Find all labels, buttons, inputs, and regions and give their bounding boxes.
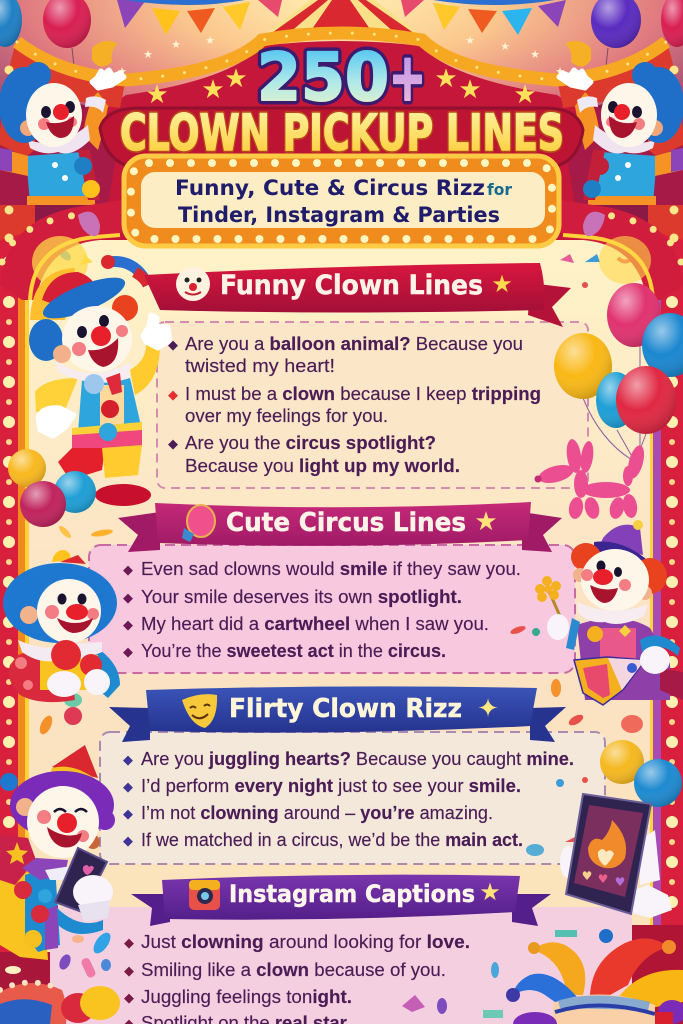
text block: cute circus lines [123, 558, 521, 661]
text block: flirty clown rizz: ◆ [123, 752, 133, 767]
phone with flame: ♥ [582, 869, 592, 883]
heading: instagram captions: Instagram Captions [229, 880, 475, 908]
marquee arch [0, 33, 683, 240]
panel: flirty clown rizz [100, 732, 605, 864]
text block: funny clown lines: Are you a balloon animal? Because you [185, 333, 523, 354]
heading: funny clown lines: Funny Clown Lines [220, 270, 483, 301]
text block: instagram captions: Juggling feelings tonight. [141, 986, 352, 1007]
stars on marquee: ★ [458, 74, 482, 104]
text block: flirty clown rizz: ◆ [123, 806, 133, 821]
text block: funny clown lines: Because you light up my world. [185, 455, 460, 476]
text block: flirty clown rizz: I’m not clowning around – you’re amazing. [141, 802, 493, 823]
icon: star: ★ [491, 271, 513, 298]
text block: funny clown lines: twisted my heart! [185, 355, 335, 376]
heading: flirty clown rizz: Flirty Clown Rizz [229, 694, 462, 724]
title: 250+ outline: + [389, 39, 426, 116]
text block: funny clown lines: Are you the circus spotlight? [185, 432, 436, 453]
text block: cute circus lines: ◆ [123, 590, 133, 605]
sky sparkles: ★ [205, 35, 215, 47]
sky sparkles [117, 35, 565, 78]
jester hat: bottom right [506, 929, 683, 1024]
icon: flame [588, 820, 626, 868]
banner: instagram captions [131, 875, 551, 926]
text block: cute circus lines: Your smile deserves its own spotlight. [141, 586, 462, 607]
text block: instagram captions: Smiling like a clown because of you. [141, 959, 446, 980]
clown: flirty section, holding phone [0, 745, 115, 960]
banner: cute circus lines [118, 502, 562, 552]
text block: funny clown lines: ◆ [168, 337, 178, 352]
inner parchment background [29, 232, 650, 1024]
curly shoe: bottom left [0, 982, 120, 1024]
balloons: top corners [0, 0, 683, 75]
title: 250+: + [389, 39, 426, 116]
icon: balloon [182, 505, 215, 542]
icon: sparkle: ✦ [477, 693, 499, 723]
stars on marquee: ★ [201, 74, 225, 104]
subtitle text: for [487, 180, 512, 199]
text block: flirty clown rizz: I’d perform every night just to see your smile. [141, 775, 521, 796]
inner frame arch scrolls [0, 200, 683, 300]
text block: flirty clown rizz [123, 748, 574, 850]
icon: star: ★ [479, 879, 501, 906]
phone with flame: ♥ [598, 872, 608, 886]
text block: funny clown lines: I must be a clown because I keep tripping [185, 383, 541, 404]
text block: flirty clown rizz: ◆ [123, 779, 133, 794]
sky sparkles: ★ [117, 66, 127, 78]
text block: cute circus lines: ◆ [123, 617, 133, 632]
title banner [100, 39, 583, 168]
icon: clown face [176, 267, 210, 301]
text block: funny clown lines: ◆ [168, 436, 178, 451]
text block: instagram captions: ◆ [124, 990, 134, 1005]
icon: star: ★ [474, 506, 498, 536]
title: 250+: 250 [257, 39, 389, 116]
clown: top left [0, 62, 124, 205]
text block: cute circus lines: Even sad clowns would smile if they saw you. [141, 558, 521, 579]
clown: cute section, holding balloons [3, 550, 120, 702]
phone with flame [560, 740, 682, 918]
text block: instagram captions: Just clowning around looking for love. [141, 931, 470, 952]
sky sparkles: ★ [171, 39, 181, 51]
subtitle marquee [124, 156, 559, 246]
stars on marquee: ★ [434, 63, 458, 93]
clown: funny section, thumbs up [8, 255, 170, 527]
sky sparkles: ★ [500, 41, 510, 53]
stars on marquee: ★ [145, 79, 169, 109]
background: circus sky [0, 0, 683, 260]
panel: instagram captions [50, 907, 632, 1024]
subtitle text [175, 176, 512, 228]
sky sparkles: ★ [530, 49, 540, 61]
text block: instagram captions [124, 931, 470, 1024]
clown: top right [559, 62, 683, 205]
text block: funny clown lines: ◆ [168, 387, 178, 402]
text block: cute circus lines: ◆ [123, 644, 133, 659]
icon: smiling mask [182, 694, 217, 728]
stars on marquee: ★ [513, 79, 537, 109]
text block: funny clown lines: over my feelings for you. [185, 405, 388, 426]
panel: funny clown lines [157, 322, 588, 488]
stars on marquee [145, 63, 537, 109]
sky sparkles: ★ [143, 49, 153, 61]
heading: cute circus lines: Cute Circus Lines [226, 508, 466, 538]
text block: cute circus lines: ◆ [123, 562, 133, 577]
subtitle text: Funny, Cute & Circus Rizz [175, 176, 485, 201]
text block: cute circus lines: You’re the sweetest act in the circus. [141, 640, 446, 661]
balloon dog [534, 438, 647, 520]
phone with flame: ♥ [615, 875, 625, 889]
banner: funny clown lines [144, 263, 571, 327]
icon: camera [189, 880, 220, 910]
stars on marquee: ★ [224, 63, 248, 93]
banner: flirty clown rizz [109, 686, 566, 742]
subtitle text: Tinder, Instagram & Parties [178, 203, 500, 228]
title: 250+ outline: 250 [257, 39, 389, 116]
text block: instagram captions: ◆ [124, 963, 134, 978]
confetti [37, 247, 643, 1018]
text block: instagram captions: ◆ [124, 935, 134, 950]
text block: flirty clown rizz: If we matched in a circus, we’d be the main act. [141, 829, 523, 850]
text block: flirty clown rizz: ◆ [123, 833, 133, 848]
text block: cute circus lines: My heart did a cartwheel when I saw you. [141, 613, 489, 634]
text block: funny clown lines [168, 333, 541, 476]
sky sparkles: ★ [555, 66, 565, 78]
sky sparkles: ★ [465, 35, 475, 47]
balloons: right bunch [554, 283, 683, 462]
panel: cute circus lines [89, 545, 575, 673]
clown: cute section, with bag [535, 520, 683, 705]
text block: flirty clown rizz: Are you juggling hearts? Because you caught mine. [141, 748, 574, 769]
circus tent roof [255, 0, 430, 42]
bunting flags [117, 0, 566, 35]
